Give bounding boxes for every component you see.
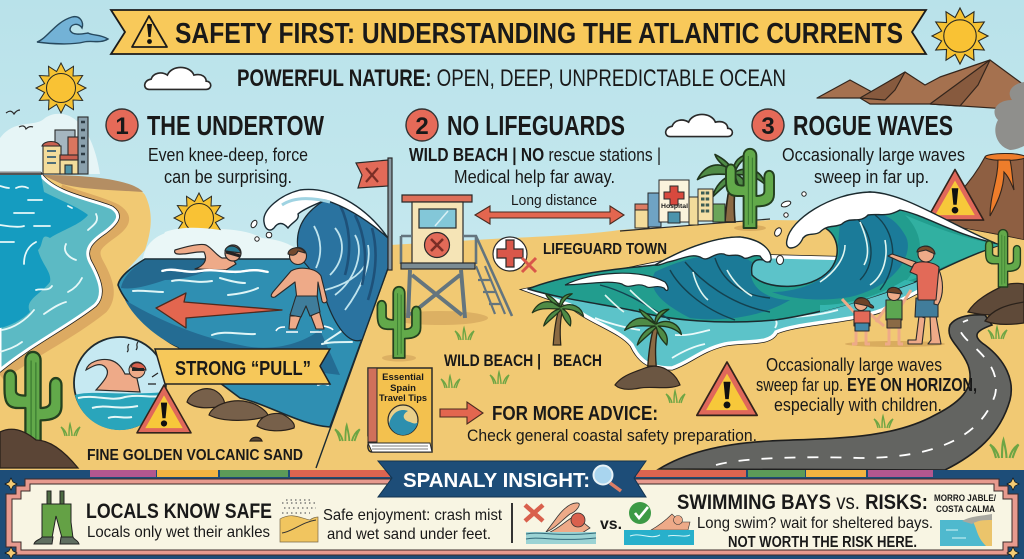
place names [934,493,996,514]
road [659,315,1011,470]
arrow: undertow pull [156,293,282,328]
rock base left [0,429,78,468]
divider [511,503,513,543]
strong pull ribbon [155,349,330,384]
swimmer [175,244,241,270]
rock under palm [615,366,680,389]
icon: bay [940,514,992,546]
middle crest foam [655,237,771,265]
hospital label: Hospital [661,203,688,210]
section 3 heading: 3 [761,113,775,140]
vs label: vs. [600,516,622,533]
title ribbon [111,10,926,54]
section 3 text [782,145,965,187]
safe enjoyment text [323,507,503,543]
icon: sun top left [36,63,86,113]
cactus left [4,352,61,446]
man standing in water [271,248,327,329]
child right [876,287,911,344]
section 3 text: Occasionally large waves [782,145,965,165]
sun lower mask cloud [150,228,265,259]
left ocean [0,174,118,370]
eye on horizon text: especially with children. [774,395,942,415]
safe enjoyment text: and wet sand under feet. [327,526,491,543]
eye on horizon text: sweep far up. EYE ON HORIZON, [756,375,977,395]
father [888,246,942,344]
arrow: more advice [440,402,483,424]
wild beach label: WILD BEACH | [444,351,541,370]
rogue wave body [528,192,1000,322]
more advice heading: FOR MORE ADVICE: [492,403,658,425]
section 1 text [148,145,308,187]
corner stars [5,478,1019,559]
mountains [817,60,1024,110]
warning flag [356,158,392,270]
lifeguard tower label: LIFEGUARD TOWN [543,241,667,258]
swimming bays heading: SWIMMING BAYS vs. RISKS: [677,491,928,514]
section 1 title: THE UNDERTOW [147,110,324,141]
section 2 text: Medical help far away. [454,167,615,187]
insight text: SPANALY INSIGHT: [403,470,590,492]
section 1 heading [106,109,324,141]
cactus big [726,149,774,228]
warning triangle left [137,385,191,433]
hospital [620,180,770,231]
rocks [187,389,294,441]
family [842,246,945,347]
section 2 heading: 2 [415,113,429,140]
rogue crest foam [787,192,995,248]
cactus shadow near hospital [734,225,766,231]
child left [842,298,884,344]
icon: magnifier [594,466,621,491]
swimmer inset circle [74,337,166,430]
diagonal sand border [316,268,388,468]
colour stripes [0,470,1024,477]
icon: cloud left [145,67,211,89]
icon: waders [34,491,79,544]
long distance label: Long distance [511,192,597,209]
warning triangle upper right [926,170,984,220]
section 2 text [409,145,661,187]
pale cloud behind swimmer [143,229,305,259]
undertow water pool [118,259,388,427]
eye on horizon text: Occasionally large waves [766,355,942,375]
icon: decorative wave [37,17,108,44]
locals heading: LOCALS KNOW SAFE [86,500,272,523]
strong pull text: STRONG “PULL” [175,358,311,380]
cactus centre [377,287,421,362]
icon: sand and mist [280,500,318,542]
book title text: Travel Tips [379,393,427,404]
icon: cloud right [666,114,732,137]
book title text: Essential [382,372,424,383]
book: travel tips [368,368,432,452]
icon: birds [6,110,33,129]
icon: unsafe swimmer [525,503,596,544]
section 2 heading [406,109,625,141]
section 2 title: NO LIFEGUARDS [447,110,625,141]
section 1 text: can be surprising. [164,167,292,187]
safe enjoyment text: Safe enjoyment: crash mist [323,507,503,524]
left crest foam [565,273,668,290]
section 1 text: Even knee-deep, force [148,145,308,165]
place names: MORRO JABLE/ [934,493,996,503]
horizon line [0,173,42,175]
palm centre left [532,294,584,345]
grass tufts [441,327,1018,458]
panel interior [12,484,1012,550]
warning triangle lower right [697,362,757,415]
section 2 text: WILD BEACH | NO rescue stations | [409,145,661,165]
rocks right [968,283,1024,324]
icon: sun top right [932,8,988,64]
sand ground [0,175,1024,470]
icon: safe swimmer [624,502,694,545]
fine sand label: FINE GOLDEN VOLCANIC SAND [87,447,303,464]
panel frame [6,479,1018,555]
grass tufts left [61,424,80,436]
section 3 heading [752,109,953,141]
section 3 title: ROGUE WAVES [793,110,953,141]
lifeguard tower [392,195,512,325]
sun behind wave [174,193,224,243]
shallow water shoreline [528,255,930,368]
grass tuft centre [335,425,360,441]
section 1 heading: 1 [115,113,129,140]
building cluster left [42,117,88,174]
swimmer water line [162,270,268,272]
place names: COSTA CALMA [936,504,995,514]
lifeguard crossed icon [493,237,536,272]
volcano [925,154,1024,240]
more advice body: Check general coastal safety preparation. [467,426,757,445]
palm near hospital [698,154,765,222]
book title text: Spain [390,383,416,394]
insight ribbon [378,461,646,497]
not worth risk: NOT WORTH THE RISK HERE. [728,534,917,551]
darker sand strip [42,175,143,192]
title text: SAFETY FIRST: UNDERSTANDING THE ATLANTIC CURRENTS [175,18,903,50]
icon: title warning [132,16,167,47]
pale clouds behind buildings [0,114,100,174]
palm centre right [625,309,681,366]
locals subtext: Locals only wet their ankles [87,524,270,541]
subtitle: POWERFUL NATURE: OPEN, DEEP, UNPREDICTABLE OCEAN [237,65,786,92]
swim advice text: Long swim? wait for sheltered bays. [697,515,933,532]
man water ripple [276,326,333,332]
volcano smoke [994,82,1024,150]
arrow: long distance [475,192,624,224]
big breaking wave left [250,189,388,341]
cactus right [986,230,1020,287]
spray drops [776,256,784,264]
bottom panel [0,461,1024,559]
eye on horizon text [756,355,977,415]
section 3 text: sweep in far up. [814,167,929,187]
wet sand band [0,190,123,375]
book title text [379,372,427,404]
wild beach label: BEACH [553,351,602,370]
